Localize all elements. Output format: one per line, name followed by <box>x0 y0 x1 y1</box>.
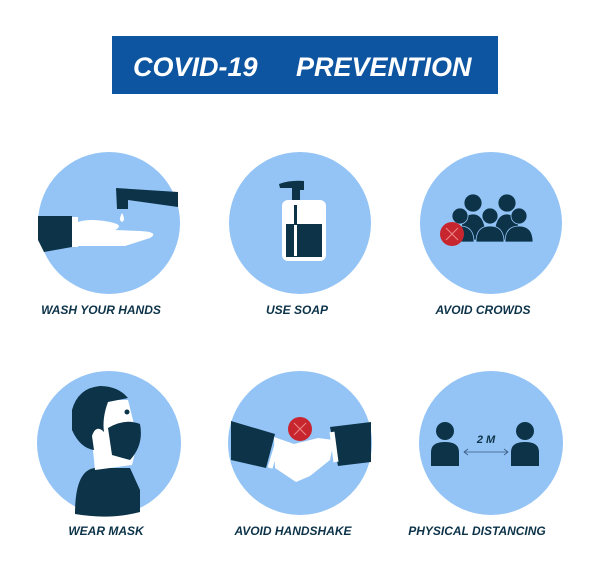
label: WASH YOUR HANDS <box>41 303 161 317</box>
icon: handshake <box>231 421 371 482</box>
panel: use soap <box>229 152 371 317</box>
panel: physical distancing: 2 M <box>476 434 496 446</box>
icon: faucet <box>116 188 178 209</box>
icon: person right <box>511 422 539 466</box>
icon: hand <box>38 216 72 252</box>
panel: avoid crowds: AVOID CROWDS <box>434 303 531 317</box>
circle background <box>38 152 180 294</box>
panel: avoid handshake: AVOID HANDSHAKE <box>233 524 353 538</box>
panel: avoid handshake <box>228 371 372 538</box>
panel: physical distancing <box>408 371 563 538</box>
arrow <box>464 449 508 455</box>
title bar <box>112 36 498 94</box>
title bar: COVID-19 <box>133 52 258 82</box>
icon: soap bottle <box>279 181 326 261</box>
icon: red x <box>440 222 464 246</box>
panel: physical distancing: PHYSICAL DISTANCING <box>408 524 546 538</box>
panel: wear mask: WEAR MASK <box>68 524 145 538</box>
panel: use soap: USE SOAP <box>266 303 329 317</box>
title bar: PREVENTION <box>296 52 472 82</box>
icon: person left <box>431 422 459 466</box>
panel: wear mask <box>37 371 181 538</box>
icon: crowd <box>446 194 533 242</box>
icon: water drop <box>120 213 124 222</box>
icon: masked person <box>72 386 141 517</box>
panel: avoid crowds <box>420 152 562 317</box>
panel: wash your hands <box>38 152 180 317</box>
icon: red x <box>288 417 312 441</box>
